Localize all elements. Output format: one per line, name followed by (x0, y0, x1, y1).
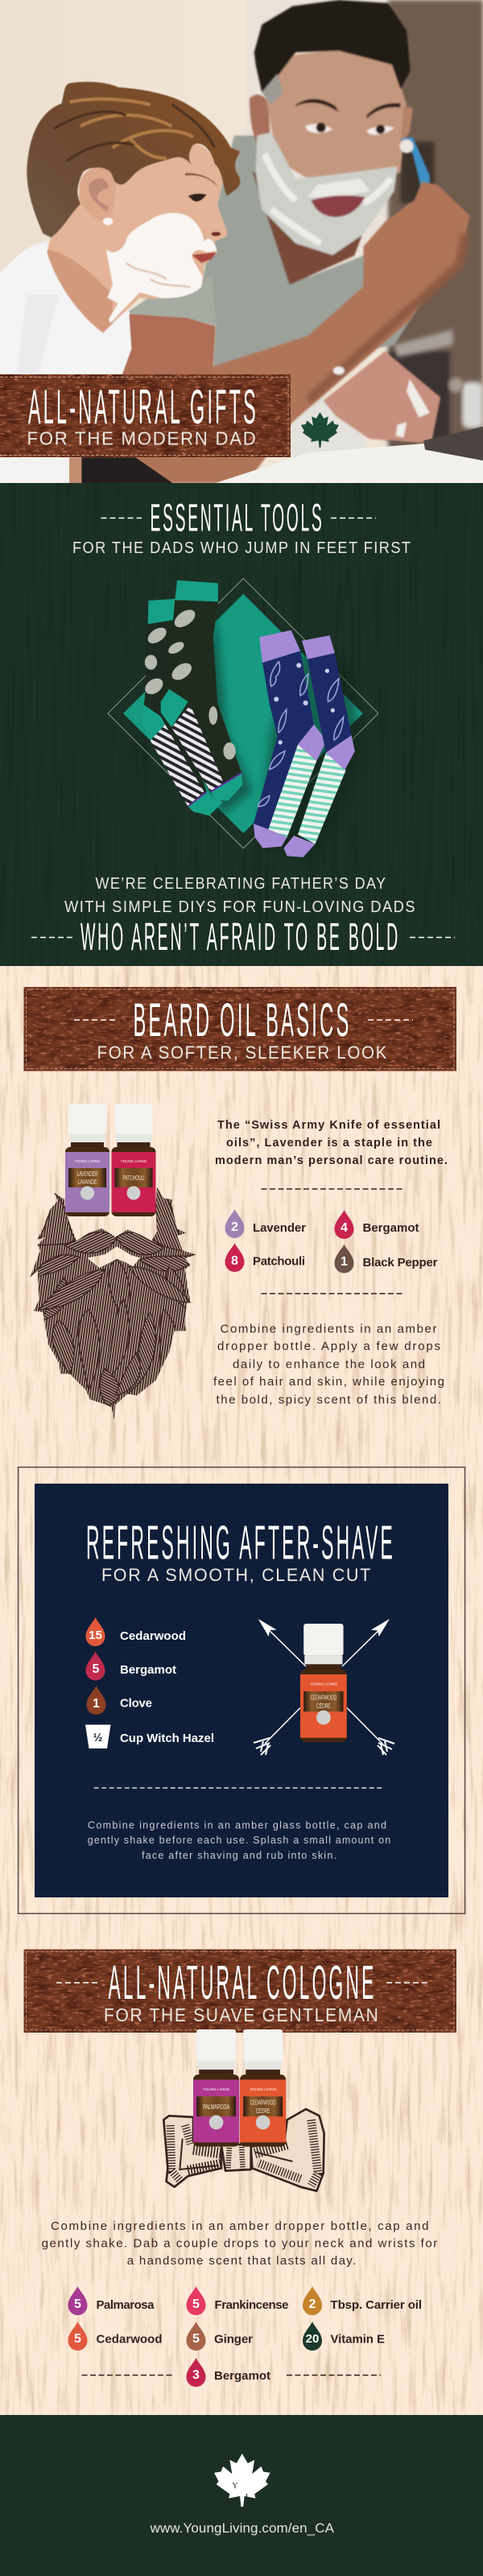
directions text (213, 1322, 444, 1407)
ingredient: bergamot: 5 (93, 1662, 100, 1676)
ingredient: witch hazel cup: Cup Witch Hazel (120, 1732, 214, 1745)
intro text: oils”, Lavender is a staple in the (226, 1137, 432, 1150)
ingredient: bergamot: Bergamot (120, 1663, 176, 1677)
ingredient: lavender: Lavender (253, 1221, 306, 1235)
directions text: gently shake before each use. Splash a small amount on (88, 1835, 390, 1846)
ingredient: ginger: Ginger (214, 2333, 253, 2346)
ingredient: witch hazel cup: ½ (93, 1731, 103, 1744)
ingredient: lavender (225, 1209, 306, 1238)
ingredient: frankincense: 5 (192, 2297, 200, 2311)
ingredient: frankincense: Frankincense (214, 2298, 288, 2312)
ingredient: black pepper: Black Pepper (362, 1256, 438, 1269)
panel: refreshing after-shave (19, 1468, 465, 1913)
ingredient: cedarwood: Cedarwood (97, 2333, 163, 2346)
boy's face (47, 144, 227, 332)
hero leather banner (0, 374, 291, 457)
directions text: a handsome scent that lasts all day. (127, 2254, 356, 2268)
ingredient: clove: Clove (120, 1697, 152, 1710)
bottle: patchouli: PATCHOULI (122, 1174, 145, 1182)
ingredient: frankincense (187, 2286, 288, 2315)
bottle: cedarwood: YOUNG LIVING (310, 1682, 337, 1687)
ingredient: patchouli (225, 1243, 305, 1272)
website url: www.YoungLiving.com/en_CA (150, 2520, 335, 2536)
leather banner (24, 1950, 456, 2033)
directions text: Combine ingredients in an amber (221, 1322, 436, 1336)
ingredient: carrier oil: Tbsp. Carrier oil (330, 2298, 422, 2312)
panel: beard oil basics (24, 987, 456, 1433)
bottle: cedarwood: CÈDRE (316, 1702, 331, 1710)
bottle: cedarwood (300, 1624, 347, 1742)
leather banner (24, 987, 456, 1071)
bottle: cedarwood: CEDRE (256, 2107, 270, 2115)
directions text: dropper bottle. Apply a few drops (217, 1340, 440, 1353)
ingredient: bergamot (335, 1210, 419, 1239)
beard illustration (31, 1187, 196, 1420)
navy sock, right (258, 635, 355, 857)
socks illustration (108, 578, 378, 857)
mouth and eye (192, 252, 216, 263)
ingredient: cedarwood (68, 2322, 163, 2351)
bottle: palmarosa: PALMAROSA (203, 2103, 230, 2111)
ingredient: black pepper (335, 1245, 438, 1274)
directions text: face after shaving and rub into skin. (142, 1850, 336, 1861)
icon: green maple leaf (301, 412, 339, 448)
sink and phone (216, 444, 483, 483)
ingredient: bergamot (85, 1652, 176, 1681)
hero photo: father and son shaving (0, 0, 483, 483)
subheading: FOR A SMOOTH, CLEAN CUT (101, 1565, 372, 1585)
bottle: cedarwood: CEDARWOOD (311, 1693, 336, 1701)
ingredient: carrier oil (303, 2286, 422, 2315)
bottle: cedarwood: YOUNG LIVING (250, 2087, 277, 2091)
ingredient: palmarosa: 5 (74, 2297, 81, 2311)
ingredient: patchouli: Patchouli (253, 1254, 305, 1269)
panel: essential tools (0, 483, 483, 966)
icon: white maple leaf logo (214, 2454, 270, 2507)
intro text (215, 1119, 448, 1167)
ingredient: lavender: 2 (231, 1220, 238, 1234)
ingredient: vitamin e: Vitamin E (330, 2333, 385, 2346)
bottle: lavender: LAVENDER (77, 1170, 98, 1178)
ingredient: bergamot: Bergamot (362, 1221, 419, 1235)
ingredient: bergamot: Bergamot (214, 2369, 270, 2383)
panel: all-natural cologne (24, 1950, 456, 2387)
ingredient: palmarosa (68, 2286, 155, 2315)
black sock, left (141, 599, 223, 815)
ingredient: bergamot: 4 (341, 1221, 348, 1235)
bottle: lavender (65, 1104, 109, 1216)
directions text: feel of hair and skin, while enjoying (213, 1375, 444, 1389)
subheading: FOR A SOFTER, SLEEKER LOOK (97, 1042, 388, 1063)
ingredient: bergamot (187, 2358, 270, 2387)
subheading: FOR THE DADS WHO JUMP IN FEET FIRST (72, 539, 412, 557)
bottle: lavender: YOUNG LIVING (74, 1159, 101, 1163)
ingredient: cedarwood: 5 (74, 2332, 81, 2346)
icon: white maple leaf logo: L (246, 2493, 250, 2502)
boy (0, 80, 241, 374)
bottle: cedarwood (240, 2029, 286, 2147)
ingredient: black pepper: 1 (341, 1255, 348, 1269)
ear (79, 167, 116, 221)
bottle: cedarwood: CEDARWOOD (250, 2099, 276, 2107)
directions text: gently shake. Dab a couple drops to your neck and wrists for (42, 2236, 437, 2251)
ingredient: vitamin e (303, 2322, 385, 2351)
directions text: Combine ingredients in an amber dropper bottle, cap and (51, 2219, 429, 2233)
man (133, 0, 430, 369)
ingredient: vitamin e: 20 (306, 2332, 319, 2346)
panel: essential tools: WITH SIMPLE DIYS FOR FUN-LOVING DADS (64, 898, 416, 916)
directions text (42, 2219, 437, 2268)
ingredient: carrier oil: 2 (309, 2297, 316, 2311)
ingredient: cedarwood: 15 (89, 1629, 102, 1642)
subheading: FOR THE SUAVE GENTLEMAN (104, 2004, 380, 2025)
ingredient: patchouli: 8 (231, 1254, 238, 1268)
navy sock, left (254, 630, 327, 848)
icon: white maple leaf logo: Y (232, 2482, 238, 2491)
directions text: Combine ingredients in an amber glass bottle, cap and (88, 1819, 386, 1831)
ingredient: palmarosa: Palmarosa (97, 2298, 155, 2312)
intro text: The “Swiss Army Knife of essential (217, 1119, 440, 1132)
bottle: lavender: LAVANDE (77, 1179, 97, 1186)
bottle: patchouli (111, 1104, 156, 1216)
ingredient: ginger (187, 2322, 253, 2351)
page backgrounds (0, 966, 483, 2415)
bow tie illustration (163, 2109, 324, 2191)
ingredient: cedarwood: Cedarwood (120, 1629, 186, 1643)
intro text: modern man’s personal care routine. (215, 1154, 448, 1167)
boy's hair (27, 82, 240, 237)
footer (0, 2415, 483, 2576)
directions text: daily to enhance the look and (233, 1357, 425, 1372)
arm (81, 182, 470, 483)
ingredient: ginger: 5 (192, 2332, 200, 2346)
icon: crossed arrows (254, 1619, 394, 1755)
bottle: palmarosa (193, 2029, 239, 2147)
ingredient: bergamot: 3 (192, 2368, 200, 2382)
ingredient: cedarwood (85, 1617, 186, 1646)
bottle: patchouli: YOUNG LIVING (121, 1159, 147, 1163)
ingredient: witch hazel cup (85, 1724, 214, 1748)
black sock, right (142, 580, 243, 801)
foam (106, 213, 217, 324)
below banner: shirt, dark trousers (0, 431, 69, 483)
closing text: WE’RE CELEBRATING FATHER’S DAY (95, 875, 386, 893)
hero subtitle: FOR THE MODERN DAD (27, 428, 258, 449)
boy's shirt (0, 242, 131, 378)
directions text (88, 1819, 390, 1861)
directions text: the bold, spicy scent of this blend. (216, 1393, 441, 1407)
man's sleeve and upper arm (129, 274, 216, 326)
ingredient: clove (87, 1686, 152, 1715)
ingredient: clove: 1 (93, 1697, 100, 1711)
bottle: palmarosa: YOUNG LIVING (203, 2087, 230, 2091)
